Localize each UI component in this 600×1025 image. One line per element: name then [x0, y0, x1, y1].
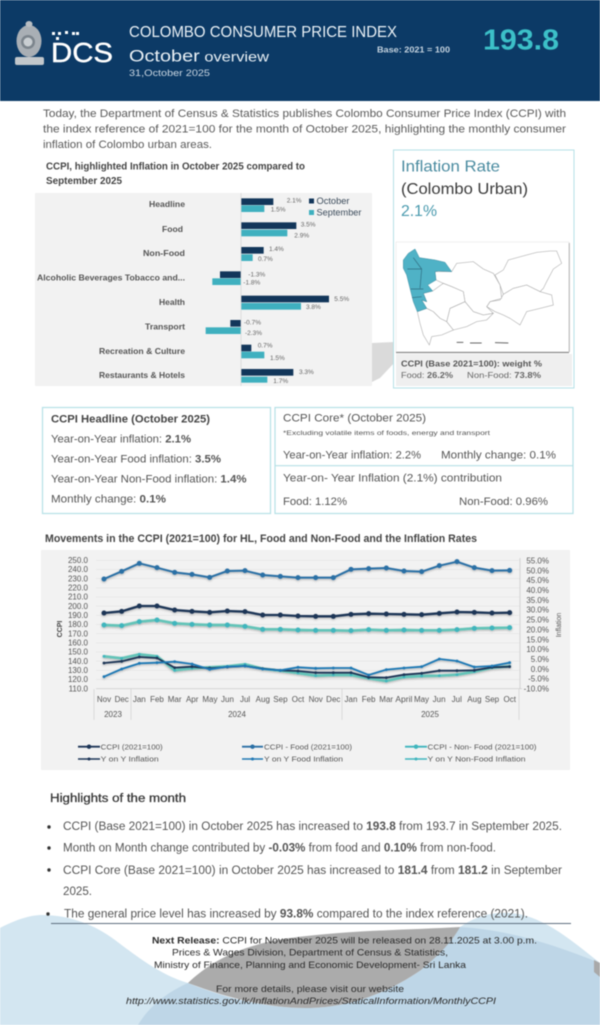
icon: national emblem	[15, 21, 44, 65]
bottom wave artwork	[0, 913, 600, 1025]
right axis labels: 20.0%	[526, 625, 549, 634]
highlight 4: The general price level has increased by 93.8% compared to the index reference (2021).	[64, 908, 528, 920]
right axis labels: 45.0%	[526, 576, 549, 585]
year labels: 2025	[421, 710, 439, 719]
month labels: Oct	[503, 695, 517, 704]
header banner	[0, 0, 600, 101]
category labels: Food	[162, 224, 183, 234]
category labels: Health	[159, 297, 185, 307]
month labels	[97, 695, 517, 704]
right axis labels: -10.0%	[524, 684, 549, 694]
data labels: 0.7%	[258, 342, 273, 349]
panel: CCPI line chart	[41, 550, 570, 770]
highlight 1: CCPI (Base 2021=100) in October 2025 has increased to 193.8 from 193.7 in September 2025.	[63, 821, 562, 833]
series: YoY food inflation	[104, 659, 510, 677]
data labels	[243, 198, 349, 385]
data labels: 3.5%	[301, 221, 316, 228]
legend: CCPI: CCPI (2021=100)	[101, 742, 163, 751]
series: CCPI headline	[104, 606, 510, 616]
data labels: -1.3%	[248, 272, 266, 279]
data labels: 3.8%	[306, 304, 321, 311]
bar chart heading	[46, 162, 305, 187]
month labels: Jan	[133, 695, 146, 704]
month labels: May	[202, 695, 217, 704]
data labels: 1.5%	[271, 207, 286, 214]
title: COLOMBO CONSUMER PRICE INDEX	[129, 24, 397, 41]
category labels: Transport	[145, 322, 185, 332]
data labels: 2.1%	[287, 198, 302, 205]
month labels: April	[395, 695, 413, 704]
month labels: Mar	[168, 695, 182, 704]
right axis labels	[524, 556, 549, 694]
headline index value: 193.8	[483, 24, 559, 56]
highlights section	[46, 793, 562, 920]
month labels: Nov	[309, 695, 323, 704]
left axis labels: 140.0	[68, 657, 89, 666]
contribution heading: Year-on- Year Inflation (2.1%) contribution	[283, 473, 502, 485]
legend: YoY food: Y on Y Food Inflation	[264, 755, 343, 764]
right axis labels: 25.0%	[526, 616, 549, 625]
data labels: 3.3%	[299, 369, 314, 376]
highlight 3: CCPI Core (Base 2021=100) in October 2025 has increased to 181.4 from 181.2 in September	[63, 865, 562, 877]
data labels: 1.7%	[273, 378, 288, 385]
month labels: Dec	[326, 695, 340, 704]
next release: Next Release: CCPI for November 2025 will be released on 28.11.2025 at 3.00 p.m.	[152, 935, 537, 946]
subtitle: October overview	[129, 46, 270, 66]
category labels	[37, 199, 185, 380]
plotted series	[104, 562, 510, 681]
left axis labels: 150.0	[68, 648, 89, 657]
left axis labels: 170.0	[68, 629, 89, 638]
legend: CCPI non-food: CCPI - Non- Food (2021=100)	[428, 742, 537, 751]
left axis labels: 210.0	[68, 593, 89, 602]
legend: YoY inflation	[78, 755, 159, 764]
series: CCPI food	[104, 562, 510, 579]
month labels: Sep	[485, 695, 500, 704]
right axis labels: 0.0%	[531, 665, 549, 674]
right axis labels: -5.0%	[528, 675, 549, 684]
series: YoY non-food inflation	[104, 654, 510, 681]
month labels: Feb	[362, 695, 376, 704]
month labels: Apr	[186, 695, 199, 704]
panel: CCPI core	[275, 408, 573, 514]
right axis title: Inflation	[556, 613, 563, 637]
legend: CCPI	[78, 742, 163, 751]
left axis labels: 130.0	[68, 666, 89, 675]
category labels: Restaurants & Hotels	[99, 370, 185, 380]
month labels: Jan	[345, 695, 357, 704]
non-food inflation: Year-on-Year Non-Food inflation: 1.4%	[51, 474, 247, 486]
data labels: 0.7%	[258, 256, 273, 263]
ministry: Ministry of Finance, Planning and Economic Development- Sri Lanka	[154, 960, 467, 971]
highlights heading: Highlights of the month	[50, 793, 186, 805]
month labels: Feb	[150, 695, 164, 704]
right axis labels: 55.0%	[526, 556, 549, 566]
bar chart heading: CCPI, highlighted Inflation in October 2025 compared to	[46, 162, 305, 172]
year labels	[104, 710, 439, 719]
non-food contribution: Non-Food: 0.96%	[459, 496, 548, 508]
month labels: Jul	[452, 695, 462, 704]
region label: (Colombo Urban)	[401, 181, 528, 198]
weight summary	[396, 354, 572, 386]
chart legend	[309, 196, 362, 218]
month labels: Nov	[97, 695, 111, 704]
inflation rate value: 2.1%	[401, 203, 437, 220]
base note: Base: 2021 = 100	[377, 46, 451, 54]
series: YoY headline inflation	[104, 657, 510, 678]
chart legend: October	[316, 196, 350, 207]
core panel title: CCPI Core* (October 2025)	[283, 413, 426, 425]
panel: CCPI headline	[42, 408, 270, 514]
line chart heading: Movements in the CCPI (2021=100) for HL, Food and Non-Food and the Inflation Rates	[45, 533, 477, 545]
category labels: Non-Food	[143, 248, 185, 258]
data labels: -0.7%	[244, 319, 261, 326]
category labels: Headline	[149, 199, 185, 209]
logo: DCS: DCS	[51, 37, 113, 68]
bar chart heading: September 2025	[46, 176, 122, 187]
data labels: 1.5%	[270, 355, 285, 362]
month labels: Mar	[379, 695, 393, 704]
right axis labels: 50.0%	[526, 566, 549, 575]
food contribution: Food: 1.12%	[283, 496, 347, 508]
series: CCPI non-food	[104, 620, 510, 631]
panel: inflation by category bar chart	[35, 193, 372, 386]
left axis labels: 120.0	[68, 675, 89, 684]
month labels: Oct	[292, 695, 305, 704]
left axis labels: 160.0	[68, 638, 89, 648]
website address: http://www.statistics.gov.lk/InflationAndPrices/StaticalInformation/MonthlyCCPI	[126, 996, 496, 1007]
left axis labels: 200.0	[68, 602, 89, 611]
data labels: 5.5%	[334, 296, 349, 303]
bars	[206, 198, 329, 383]
legend: YoY inflation: Y on Y Inflation	[101, 755, 159, 764]
headline panel title: CCPI Headline (October 2025)	[51, 414, 210, 426]
intro text: Today, the Department of Census & Statistics publishes Colombo Consumer Price Index (CCPI) with	[43, 108, 566, 120]
weight summary: CCPI (Base 2021=100): weight %	[401, 360, 542, 368]
highlight 3	[47, 865, 562, 898]
food inflation: Year-on-Year Food inflation: 3.5%	[51, 454, 221, 466]
legend: CCPI food: CCPI - Food (2021=100)	[264, 742, 353, 751]
legend: YoY food	[242, 755, 343, 764]
decorative grey shadow between panels	[372, 342, 395, 382]
panel: inflation rate and map	[394, 150, 574, 388]
year labels: 2023	[104, 710, 122, 719]
right axis labels: 30.0%	[526, 606, 549, 615]
month labels: Sep	[273, 695, 288, 704]
left axis labels: 220.0	[68, 584, 89, 592]
highlight 3: 2025.	[63, 886, 92, 898]
right axis labels: 35.0%	[526, 596, 549, 605]
intro text: inflation of Colombo urban areas.	[43, 139, 212, 151]
left axis labels: 110.0	[69, 684, 89, 693]
month labels: May	[414, 695, 429, 704]
year labels: 2024	[228, 710, 246, 719]
date: 31,October 2025	[129, 68, 210, 78]
inflation rate heading: Inflation Rate	[401, 158, 500, 176]
highlight 2: Month on Month change contributed by -0.03% from food and 0.10% from non-food.	[63, 842, 496, 854]
left axis labels: 180.0	[68, 620, 89, 629]
monthly change: Monthly change: 0.1%	[51, 494, 166, 506]
month labels: Jun	[221, 695, 234, 704]
category labels: Alcoholic Beverages Tobacco and...	[37, 272, 185, 282]
chart legend: September	[316, 208, 362, 218]
data labels: 1.4%	[269, 246, 284, 253]
data labels: -1.8%	[243, 280, 261, 287]
data labels: -2.3%	[245, 330, 262, 337]
core inflation: Year-on-Year inflation: 2.2%	[283, 449, 421, 461]
month labels: Dec	[115, 695, 129, 704]
division: Prices & Wages Division, Department of Census & Statistics,	[172, 948, 448, 958]
month labels: Aug	[256, 695, 270, 704]
map of urban areas	[396, 242, 569, 352]
weight summary: Food: 26.2%	[401, 371, 453, 380]
right axis labels: 15.0%	[526, 635, 549, 644]
left axis labels: 250.0	[68, 556, 89, 565]
left axis labels: 240.0	[68, 565, 89, 574]
right axis labels: 10.0%	[526, 645, 549, 654]
weight summary: Non-Food: 73.8%	[467, 371, 541, 380]
right axis labels: 40.0%	[526, 586, 549, 595]
left axis labels: 230.0	[68, 574, 89, 583]
footer text	[126, 935, 537, 1007]
website prompt: For more details, please visit our website	[216, 984, 404, 995]
legend: YoY non-food: Y on Y Non-Food Inflation	[428, 755, 526, 764]
headline inflation: Year-on-Year inflation: 2.1%	[51, 433, 191, 445]
data labels: 2.9%	[294, 233, 309, 240]
footer rule	[51, 922, 571, 924]
left axis title: CCPI	[57, 621, 64, 637]
month labels: Jun	[433, 695, 446, 704]
intro text	[43, 108, 566, 151]
month labels: Jul	[240, 695, 250, 704]
intro text: the index reference of 2021=100 for the month of October 2025, highlighting the monthly consumer	[43, 124, 566, 136]
category labels: Recreation & Culture	[99, 346, 185, 356]
core footnote: *Excluding volatile items of foods, energy and transport	[283, 430, 490, 437]
right axis labels: 5.0%	[531, 655, 549, 664]
core monthly change: Monthly change: 0.1%	[441, 449, 556, 461]
month labels: Aug	[467, 695, 482, 704]
left axis labels: 190.0	[68, 611, 89, 620]
left axis labels	[68, 556, 89, 693]
legend	[78, 742, 537, 764]
